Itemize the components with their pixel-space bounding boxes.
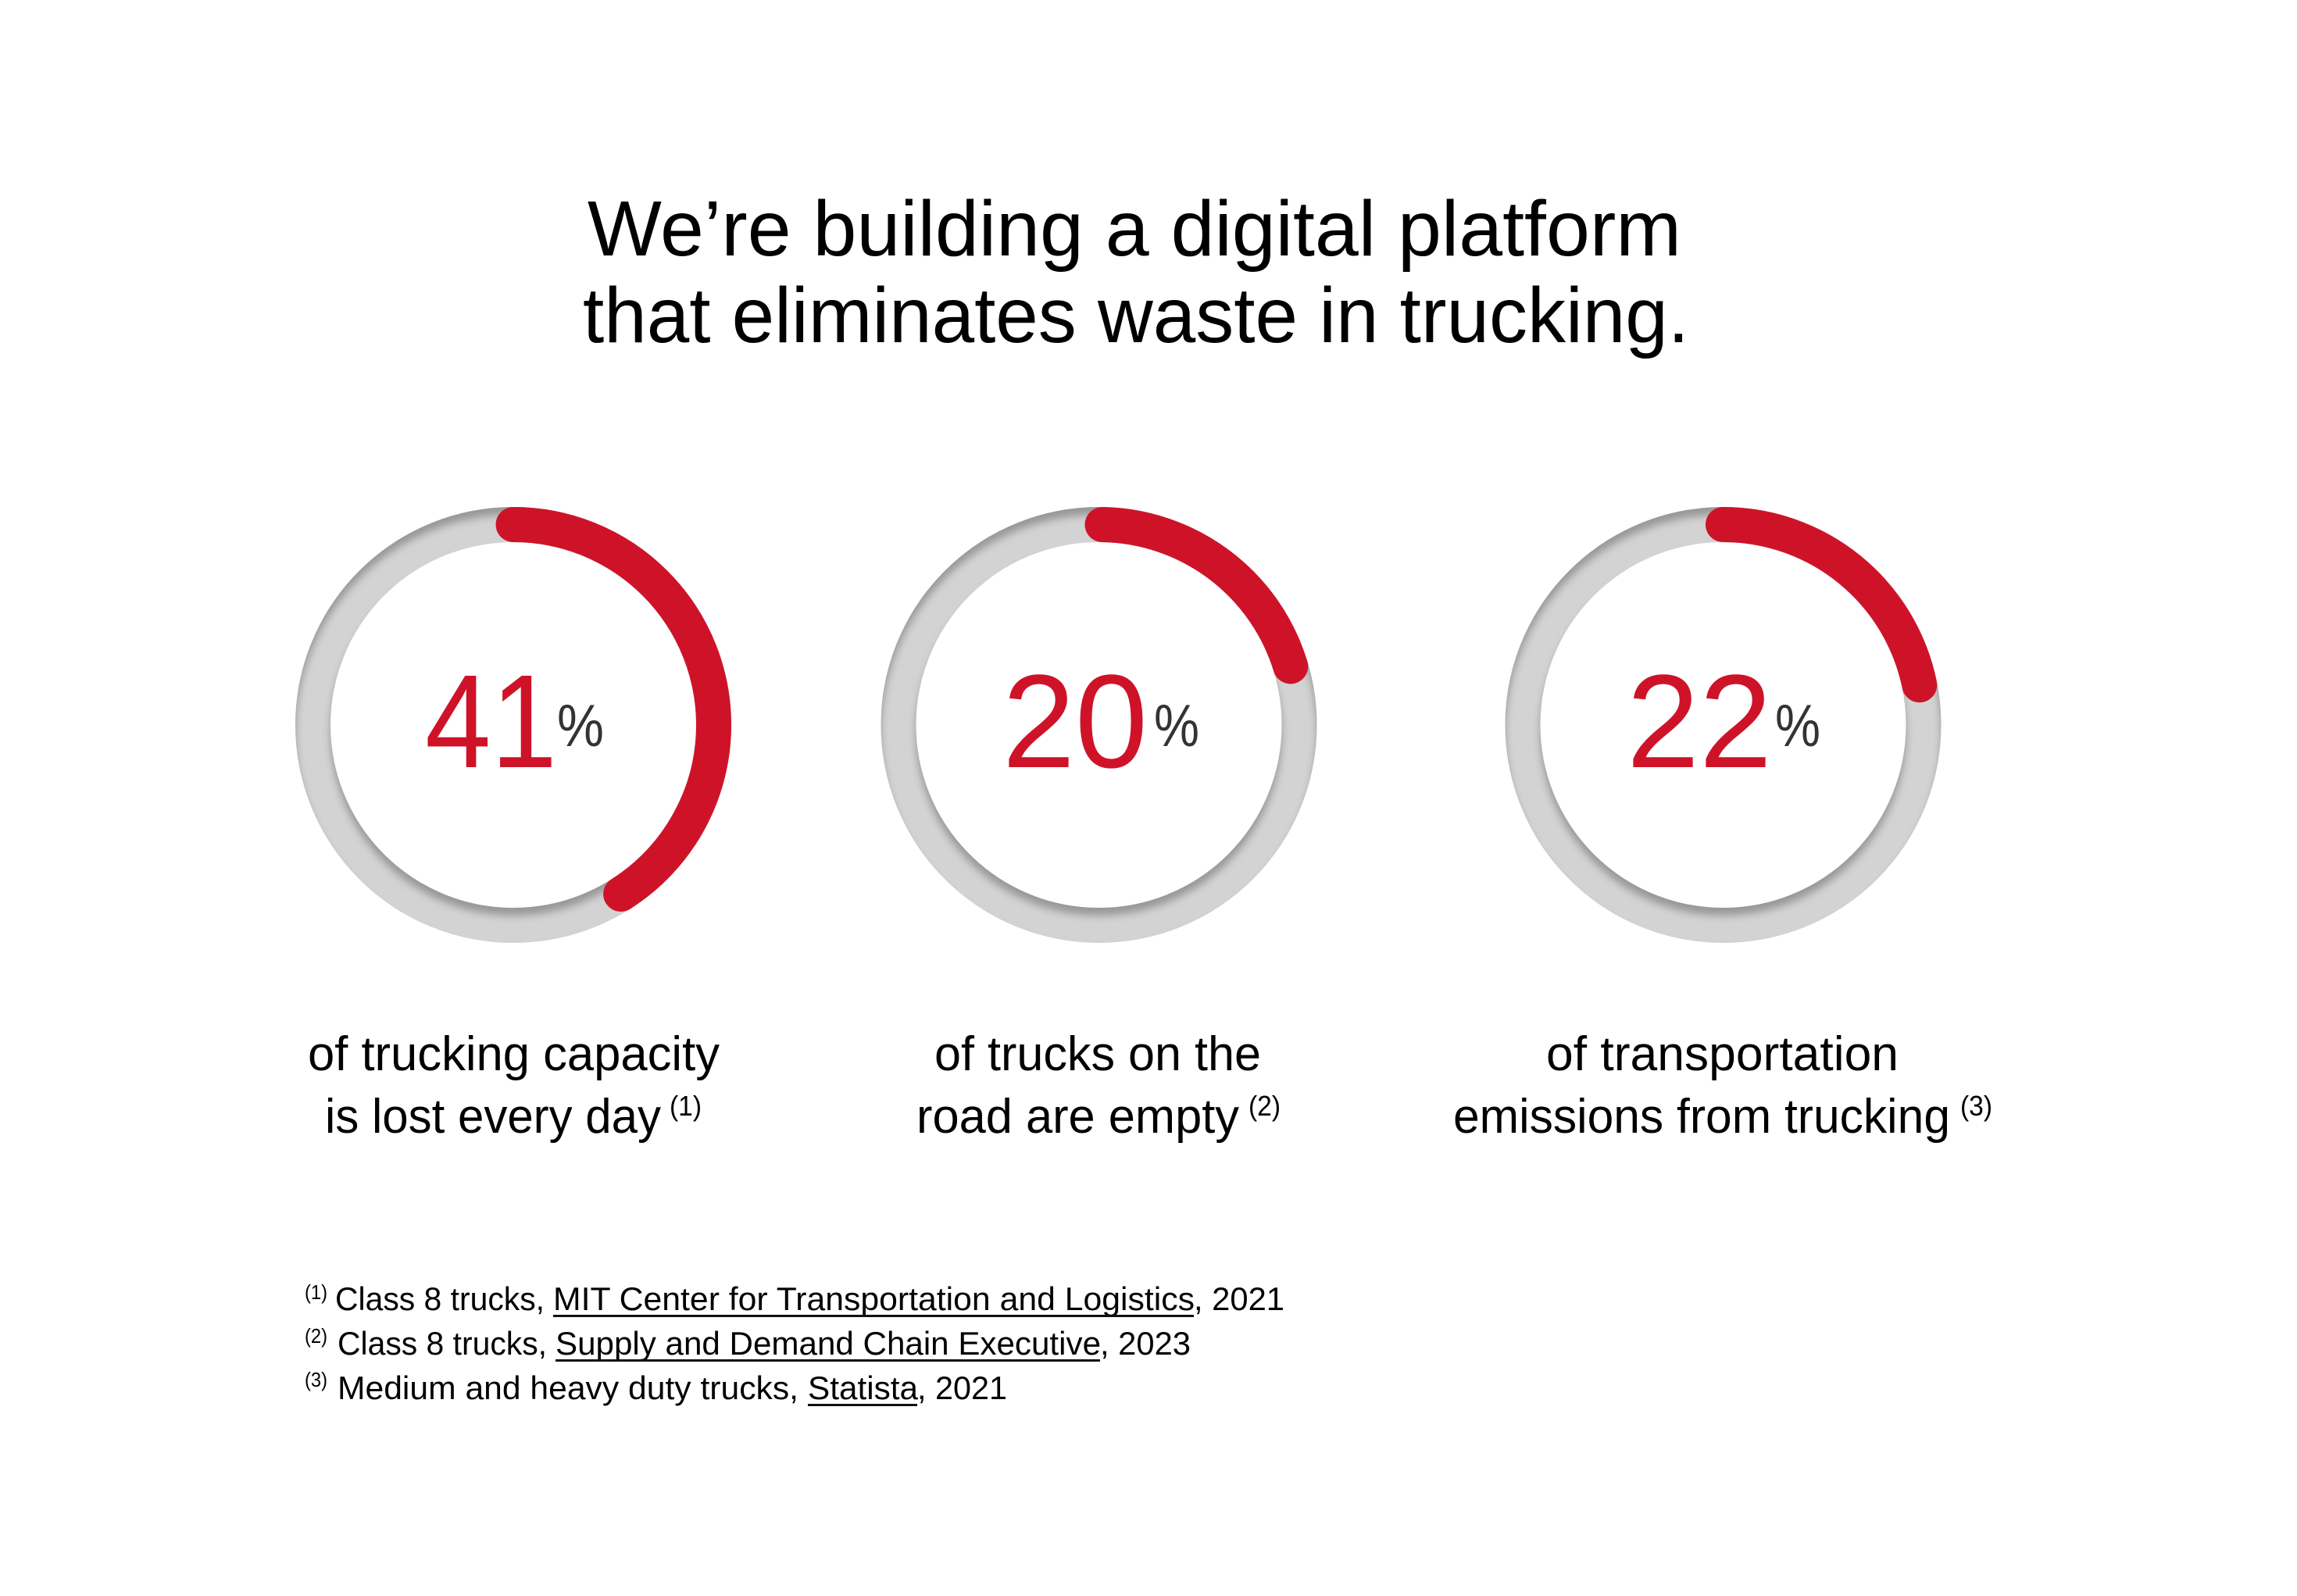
label: of transportation emissions from trucking: emissions from trucking xyxy=(1453,1090,1950,1144)
title: We’re building a digital platform xyxy=(588,185,1681,273)
label: of trucks on the road are empty: of trucks on the xyxy=(934,1027,1261,1081)
label: of trucks on the road are empty xyxy=(916,1027,1281,1144)
footnote 1 xyxy=(305,1280,1284,1317)
panel: 41% trucking capacity lost xyxy=(308,525,720,1144)
value: 41%: % xyxy=(557,693,604,759)
title xyxy=(583,185,1689,359)
value: 20%: 20 xyxy=(1002,648,1148,796)
footnote 3: , 2021 xyxy=(917,1369,1007,1406)
value: 22%: % xyxy=(1775,693,1820,759)
footnote 2: Supply and Demand Chain Executive xyxy=(555,1325,1101,1362)
label: of trucking capacity is lost every day: (1) xyxy=(670,1090,702,1122)
panel: 20% trucks empty xyxy=(895,521,1302,1144)
footnote 2: (2) xyxy=(305,1324,327,1348)
panel: 22% transportation emissions xyxy=(1453,525,1992,1144)
value: 20%: % xyxy=(1154,693,1199,759)
label: of trucks on the road are empty: (2) xyxy=(1249,1090,1281,1122)
label: of trucking capacity is lost every day: is lost every day xyxy=(325,1090,661,1144)
value: 41%: 41 xyxy=(425,648,557,796)
donut chart: 20% xyxy=(895,521,1302,929)
footnote 3: (3) xyxy=(305,1368,327,1391)
label: of trucking capacity is lost every day xyxy=(308,1027,720,1144)
footnote 3: Medium and heavy duty trucks, xyxy=(338,1369,798,1406)
label: of transportation emissions from trucking: (3) xyxy=(1960,1090,1992,1122)
label: of trucking capacity is lost every day: of trucking capacity xyxy=(308,1027,720,1081)
footnote 1: , 2021 xyxy=(1194,1280,1284,1317)
footnote 1: MIT Center for Transportation and Logistics xyxy=(553,1280,1195,1317)
label: of transportation emissions from trucking: of transportation xyxy=(1546,1027,1899,1081)
footnote 1: Class 8 trucks, xyxy=(335,1280,545,1317)
footnote 2: , 2023 xyxy=(1100,1325,1191,1362)
title: that eliminates waste in trucking. xyxy=(583,272,1689,359)
footnote 3: Statista xyxy=(808,1369,919,1406)
footnote 2: Class 8 trucks, xyxy=(338,1325,547,1362)
footnotes xyxy=(305,1280,1284,1406)
footnote 1: (1) xyxy=(305,1280,327,1304)
donut chart: 41% xyxy=(313,525,714,925)
footnote 3 xyxy=(305,1368,1007,1406)
label: of transportation emissions from trucking xyxy=(1453,1027,1992,1144)
label: of trucks on the road are empty: road are empty xyxy=(916,1090,1239,1144)
footnote 2 xyxy=(305,1324,1191,1362)
donut chart: 22% xyxy=(1523,525,1924,925)
value: 22%: 22 xyxy=(1627,648,1772,796)
